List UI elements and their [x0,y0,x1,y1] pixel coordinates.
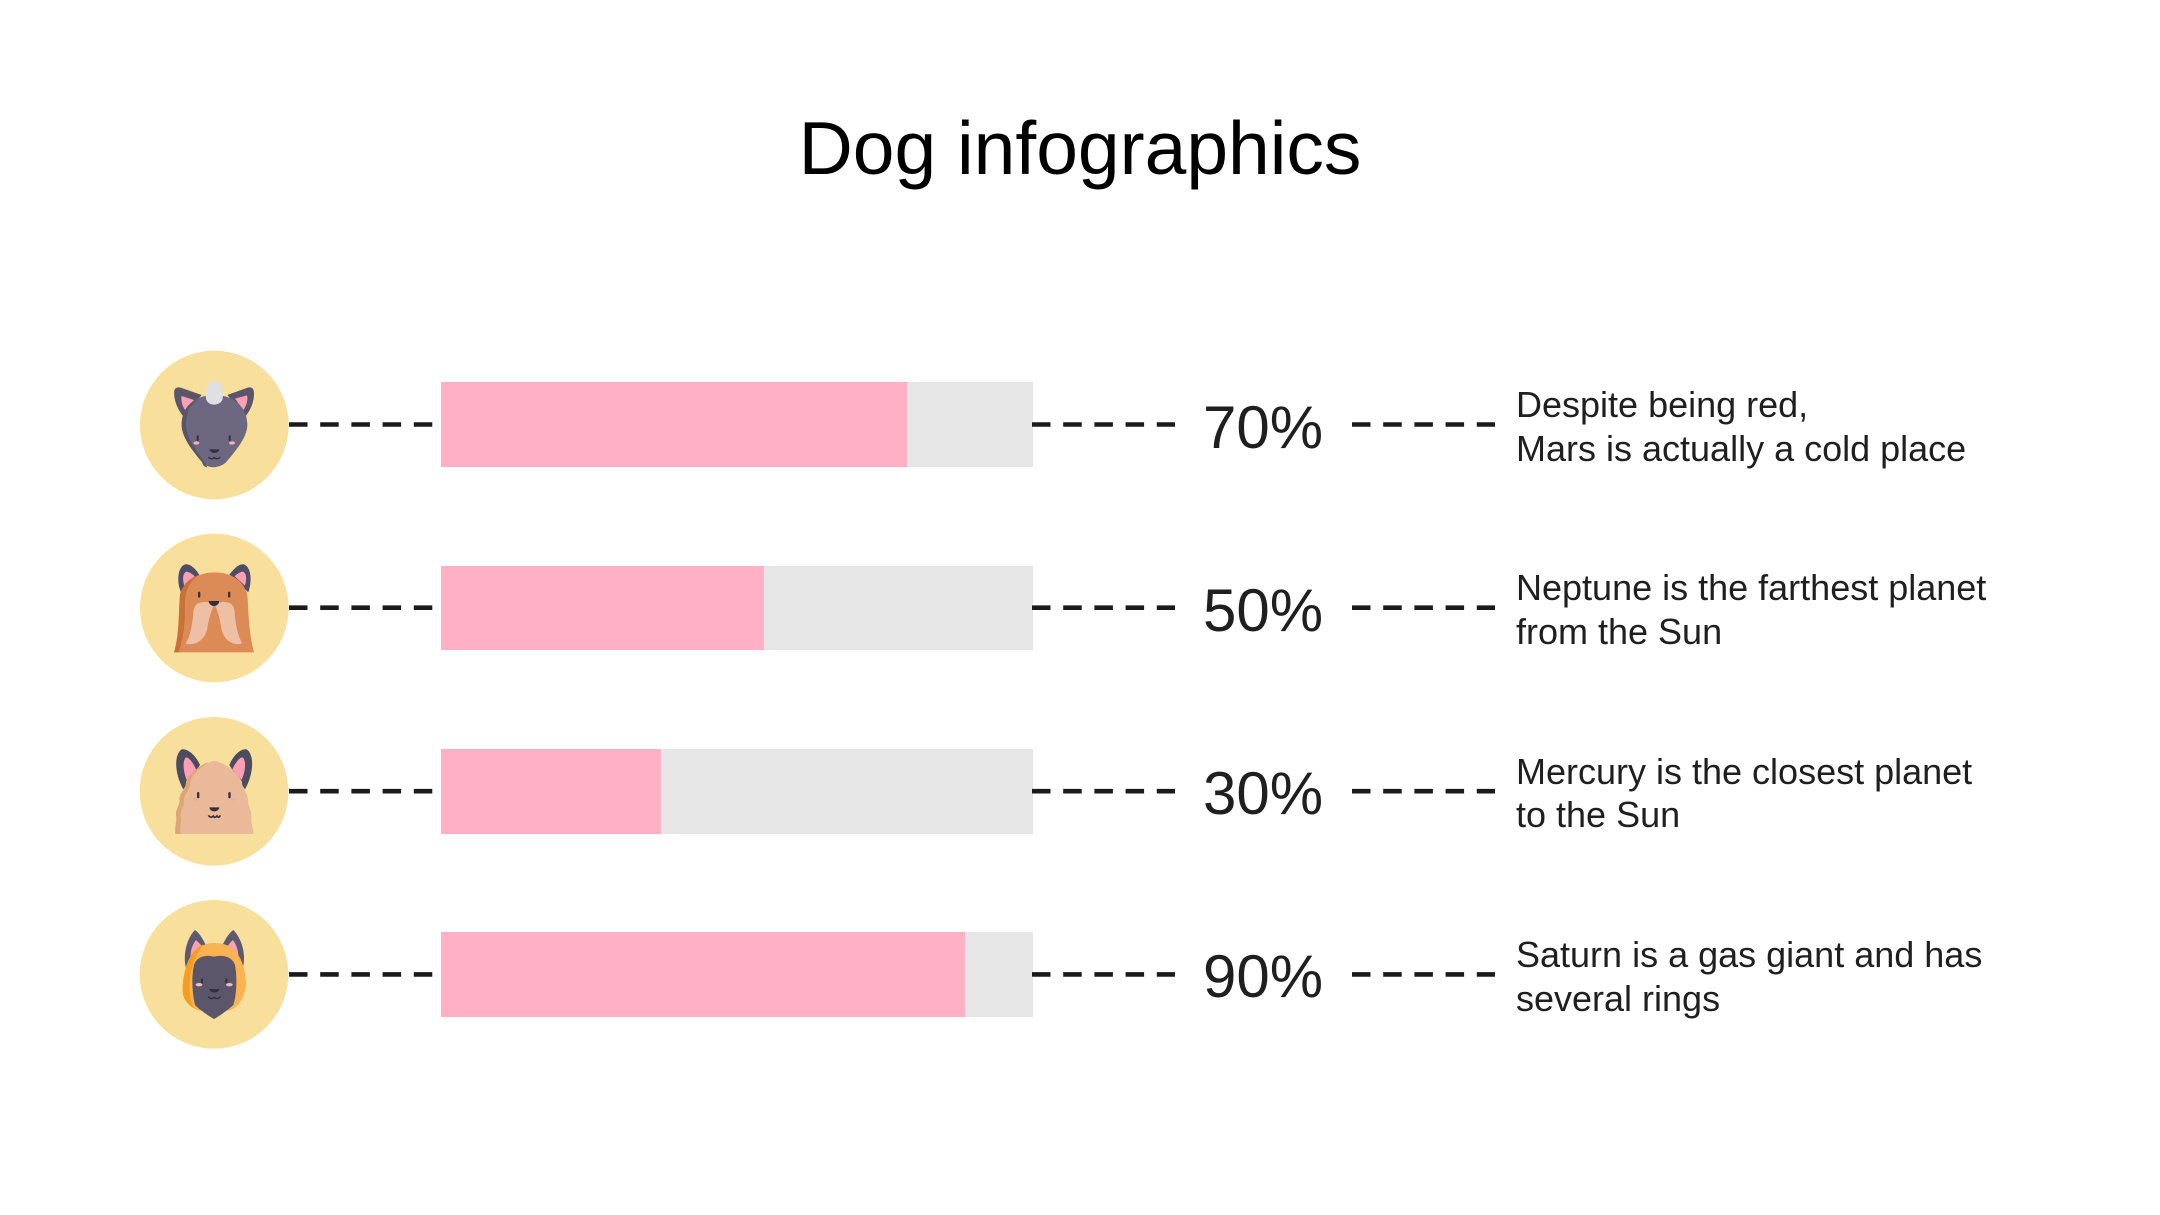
row 1 avatar: grey dog [140,351,289,499]
description 1: Despite being red, Mars is actually a cold place [1516,384,1966,469]
row 4 avatar: black and tan dog [140,900,288,1049]
row 3 progress bar 30% [441,749,1033,834]
title: Dog infographics [799,106,1361,190]
row 2 progress bar 50% [441,566,1033,650]
description 3: Mercury is the closest planet to the Sun [1516,750,1972,835]
value 30%: 30% [1203,760,1323,827]
row 4 progress bar 90% [441,932,1033,1017]
row 2 avatar: orange dog [140,534,289,682]
description 4: Saturn is a gas giant and has several rings [1516,934,1982,1019]
value 50%: 50% [1203,577,1323,644]
value 70%: 70% [1203,394,1323,461]
value 90%: 90% [1203,943,1323,1010]
description 2: Neptune is the farthest planet from the Sun [1516,567,1986,652]
row 1 progress bar 70% [441,382,1033,467]
row 3 avatar: fluffy beige dog [140,717,288,866]
dashed connectors [289,424,1495,974]
